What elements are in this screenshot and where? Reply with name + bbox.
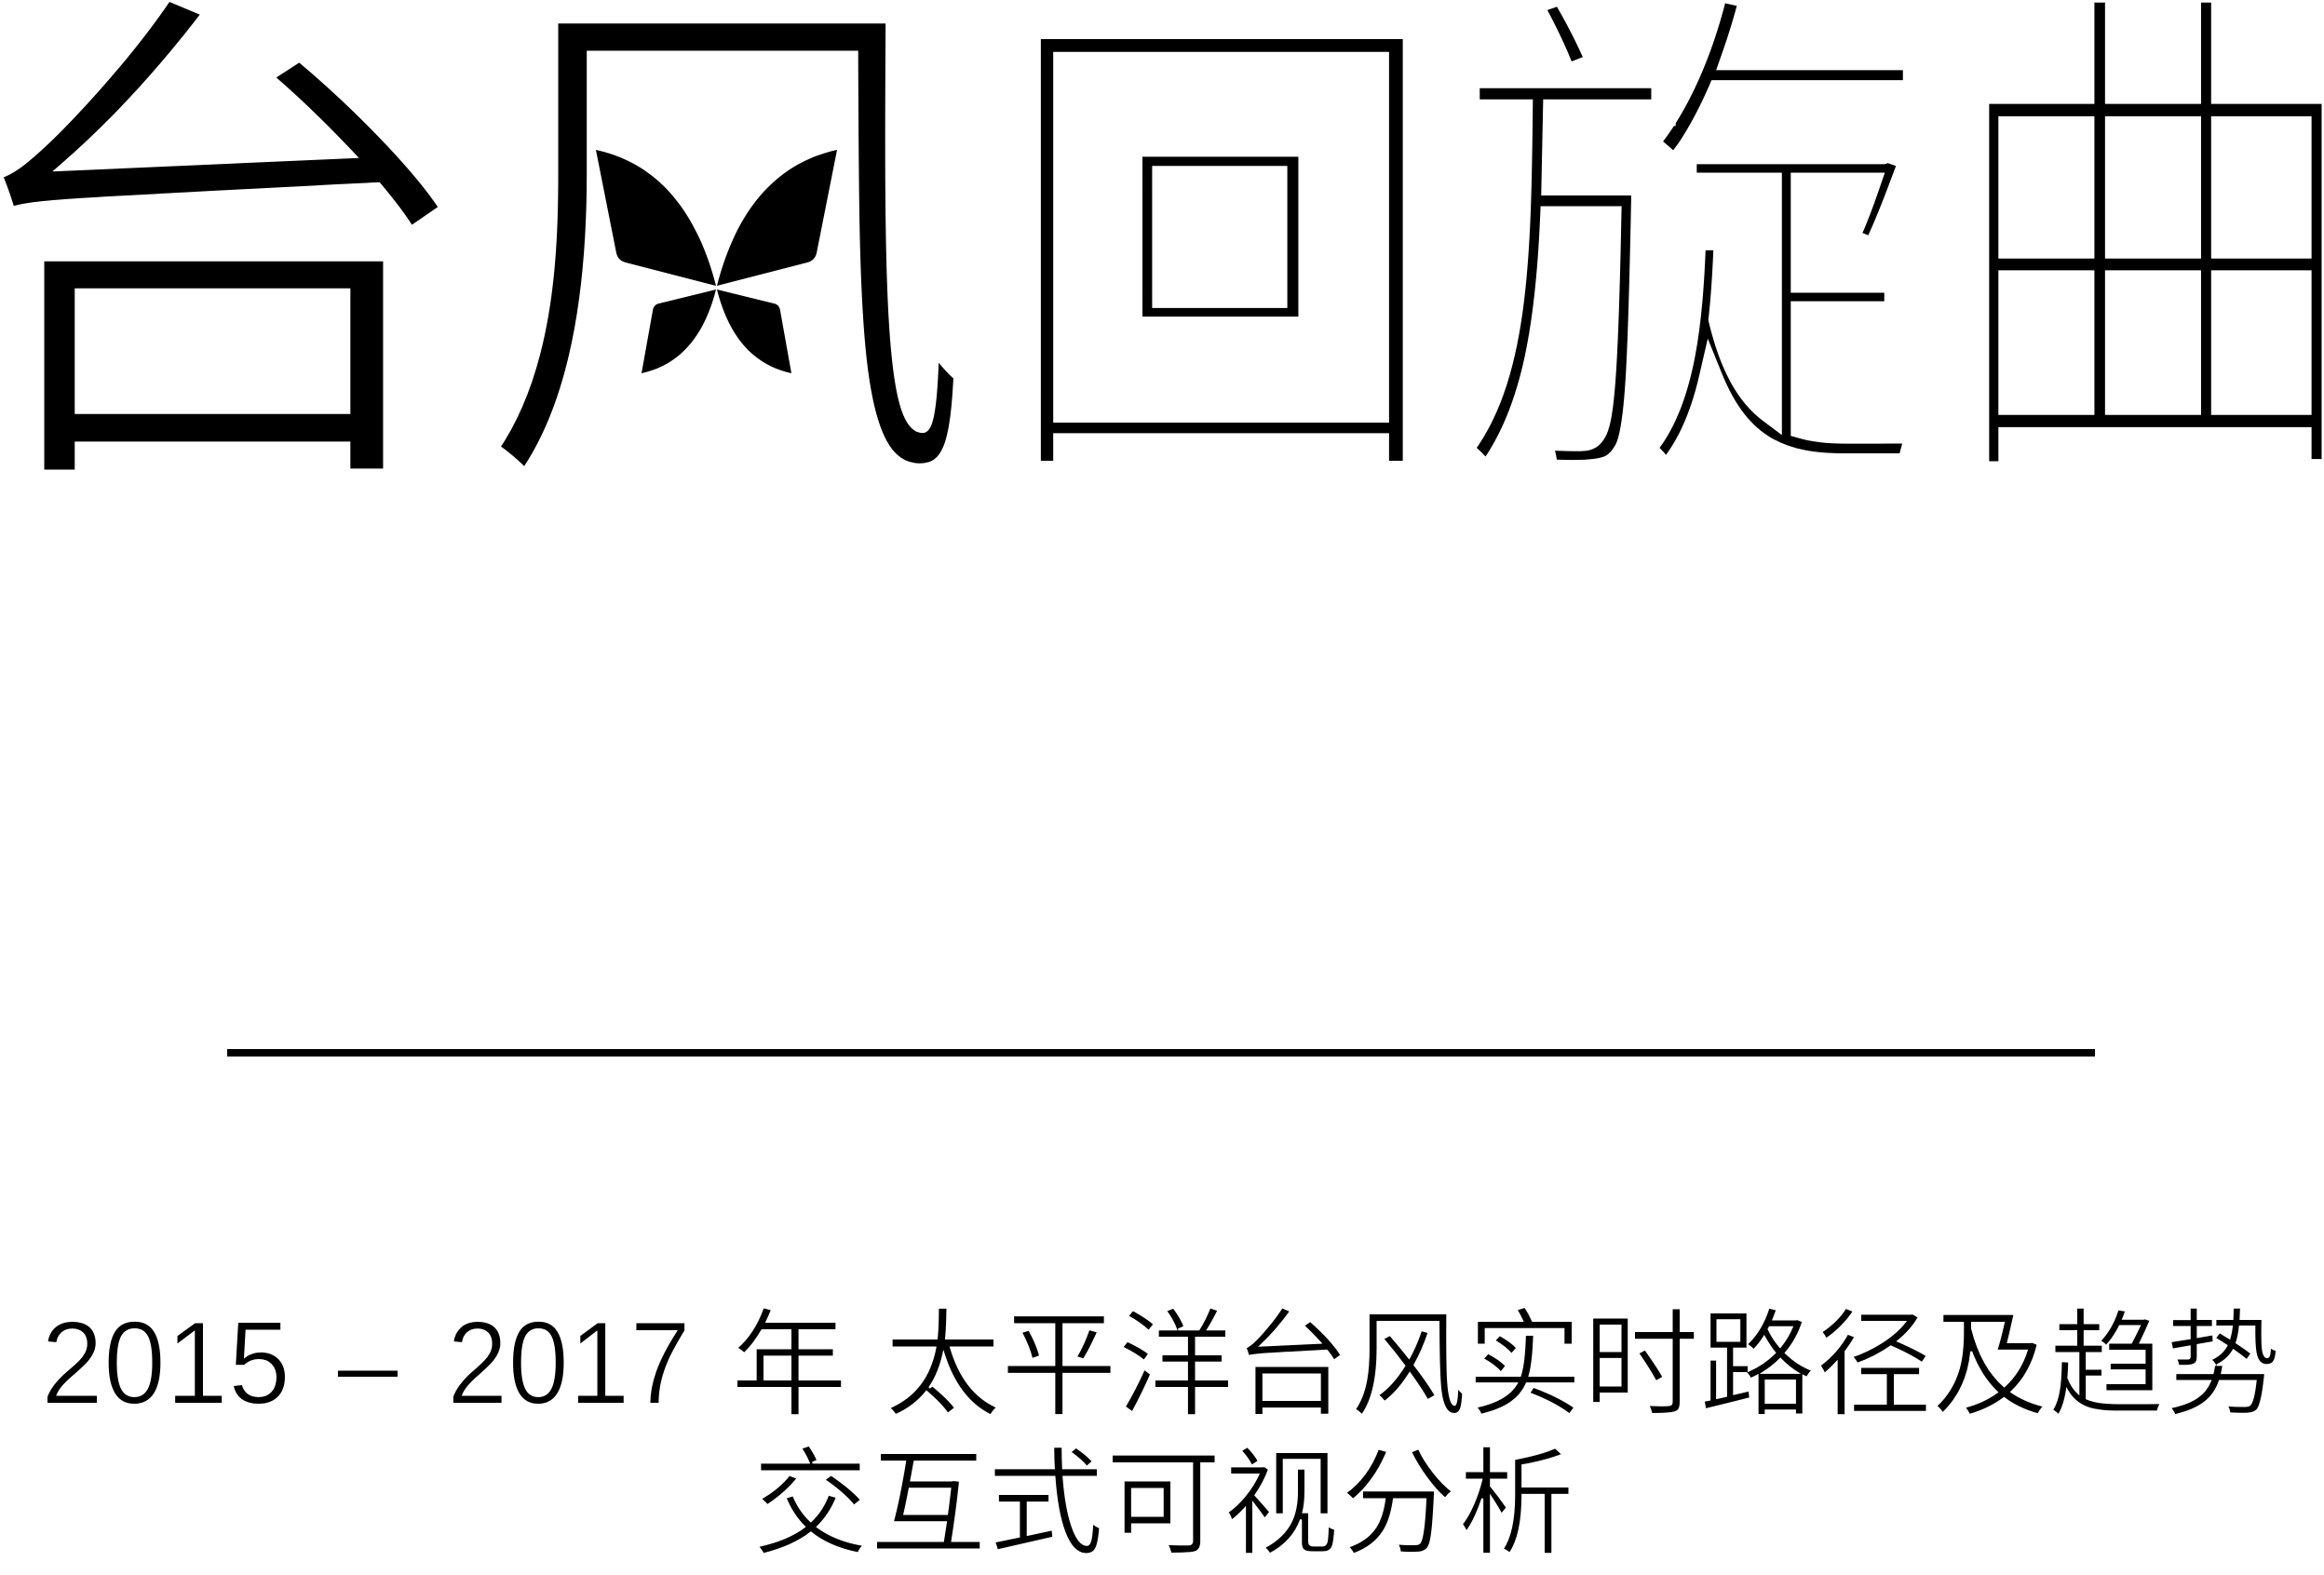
subtitle line 1: 太平洋台风实时路径及趋势 [885,1301,2281,1431]
subtitle line 2: 交互式可视分析 [752,1440,1574,1569]
subtitle line 1 [41,1297,2281,1431]
divider line [227,1049,2095,1057]
subtitle line 1: 年 [731,1301,847,1431]
icon: butterfly [596,150,837,373]
subtitle line 1: – [337,1297,399,1429]
title: 台风回旋曲 [0,0,2324,548]
subtitle line 1: 2015 [41,1297,290,1429]
subtitle line 1: 2017 [447,1297,691,1429]
